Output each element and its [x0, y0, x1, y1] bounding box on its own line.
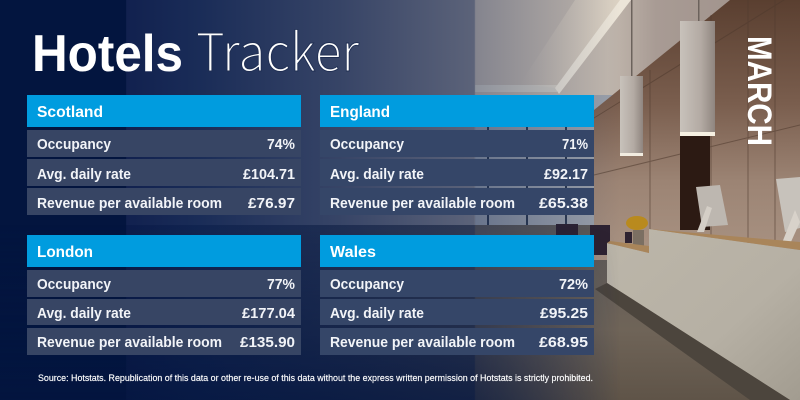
pendant lamp: small: [620, 0, 643, 156]
header: England: [320, 95, 594, 127]
row: occupancy: 72%: [559, 276, 588, 293]
row: average daily rate: £177.04: [242, 305, 296, 322]
row: revenue per available room: Revenue per available room: [330, 334, 515, 351]
row: revenue per available room: Revenue per available room: [37, 334, 222, 351]
row: occupancy: Occupancy: [37, 276, 112, 293]
title: [32, 11, 359, 86]
row: revenue per available room: [27, 188, 301, 215]
panel: England: [320, 95, 594, 215]
row: average daily rate: £95.25: [540, 305, 588, 322]
row: occupancy: 77%: [267, 276, 295, 293]
source note: Source: Hotstats. Republication of this data or other re-use of this data without the express written permission of Hotstats is strictly prohibited.: [38, 373, 593, 383]
header: Wales: [320, 235, 594, 267]
wood wall: [594, 0, 800, 260]
header: London: [27, 235, 301, 267]
row: revenue per available room: [27, 328, 301, 355]
row: average daily rate: [27, 299, 301, 325]
row: revenue per available room: [320, 328, 594, 355]
title: Hotels: [32, 25, 183, 83]
row: revenue per available room: [320, 188, 594, 215]
row: occupancy: [27, 130, 301, 157]
lobby chairs: [556, 224, 632, 255]
row: average daily rate: Avg. daily rate: [330, 166, 424, 183]
header: Scotland: [27, 95, 301, 127]
row: occupancy: 74%: [267, 136, 295, 153]
row: average daily rate: Avg. daily rate: [37, 305, 131, 322]
left navy gradient overlay: [0, 0, 620, 400]
header: England: England: [330, 104, 390, 121]
panel: London: [27, 235, 301, 355]
row: occupancy: Occupancy: [37, 136, 112, 153]
row: revenue per available room: Revenue per available room: [37, 195, 222, 212]
row: occupancy: [320, 270, 594, 297]
row: occupancy: Occupancy: [330, 136, 405, 153]
row: average daily rate: £92.17: [544, 166, 588, 183]
flowers in vase: [626, 216, 648, 246]
glass wall behind the panels: [475, 95, 615, 225]
dark column: [680, 135, 710, 230]
row: average daily rate: Avg. daily rate: [37, 166, 131, 183]
header: London: London: [37, 244, 93, 261]
row: revenue per available room: £65.38: [539, 195, 588, 212]
lower fade: [133, 267, 598, 400]
row: average daily rate: [320, 159, 594, 186]
panel: Wales: [320, 235, 594, 355]
row: average daily rate: [320, 299, 594, 325]
ceiling: [0, 0, 800, 230]
row: revenue per available room: £76.97: [248, 195, 295, 212]
panel: Scotland: [27, 95, 301, 215]
row: revenue per available room: £68.95: [539, 334, 588, 351]
header: Scotland: Scotland: [37, 104, 103, 121]
monitors: [696, 177, 800, 244]
title: Tracker: [196, 11, 359, 86]
row: occupancy: 71%: [562, 136, 588, 153]
row: occupancy: Occupancy: [330, 276, 405, 293]
row: occupancy: [320, 130, 594, 157]
row: occupancy: [27, 270, 301, 297]
header: Wales: Wales: [330, 244, 376, 261]
ceiling light cove: [475, 0, 631, 94]
pendant lamp: large: [680, 0, 715, 136]
row: revenue per available room: £135.90: [240, 334, 295, 351]
row: average daily rate: [27, 159, 301, 186]
reception desk: [595, 229, 800, 400]
row: average daily rate: Avg. daily rate: [330, 305, 424, 322]
row: average daily rate: £104.71: [243, 166, 295, 183]
wood wall seams: [594, 0, 800, 260]
floor: [0, 225, 800, 400]
month label: MARCH: MARCH: [740, 36, 778, 146]
row: revenue per available room: Revenue per available room: [330, 195, 515, 212]
